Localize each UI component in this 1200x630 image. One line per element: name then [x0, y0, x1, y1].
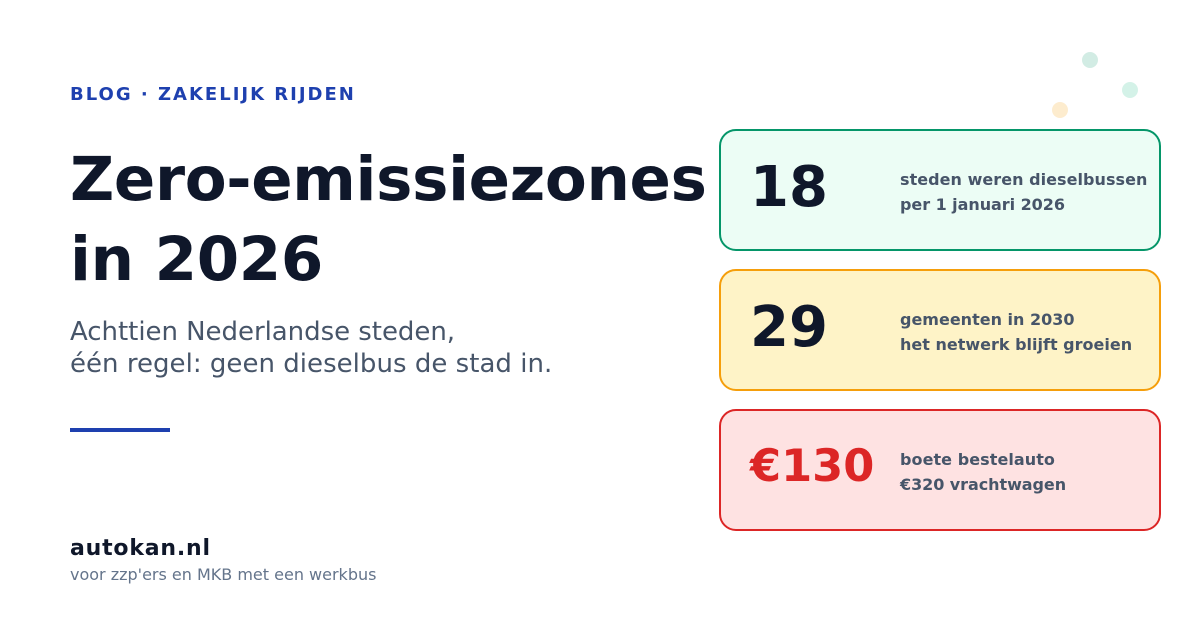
brand footer	[70, 536, 376, 584]
stat description: het netwerk blijft groeien	[900, 335, 1132, 354]
accent line	[70, 428, 170, 432]
panel: boete	[720, 410, 1160, 530]
title	[70, 144, 707, 295]
stat description	[900, 310, 1132, 354]
stat description: €320 vrachtwagen	[899, 475, 1066, 494]
subtitle	[70, 317, 552, 379]
stat: €130: €130	[749, 440, 874, 492]
panel: 18 steden	[720, 130, 1160, 250]
stat description: gemeenten in 2030	[900, 310, 1075, 329]
eyebrow label: BLOG · ZAKELIJK RIJDEN	[70, 84, 356, 105]
brand footer: voor zzp'ers en MKB met een werkbus	[70, 565, 376, 584]
subtitle: Achttien Nederlandse steden,	[70, 317, 455, 347]
stat description	[899, 450, 1066, 494]
stat description: boete bestelauto	[900, 450, 1055, 469]
stat description: per 1 januari 2026	[900, 195, 1065, 214]
stat: 29: 29	[750, 295, 828, 360]
stat: 18: 18	[750, 155, 828, 220]
title: in 2026	[70, 224, 323, 295]
stat description	[900, 170, 1147, 214]
panel: 29 gemeenten	[720, 270, 1160, 390]
stat description: steden weren dieselbussen	[900, 170, 1147, 189]
subtitle: één regel: geen dieselbus de stad in.	[70, 349, 552, 379]
title: Zero-emissiezones	[70, 144, 707, 215]
brand footer: autokan.nl	[70, 536, 211, 561]
decorative dots	[1052, 52, 1138, 118]
